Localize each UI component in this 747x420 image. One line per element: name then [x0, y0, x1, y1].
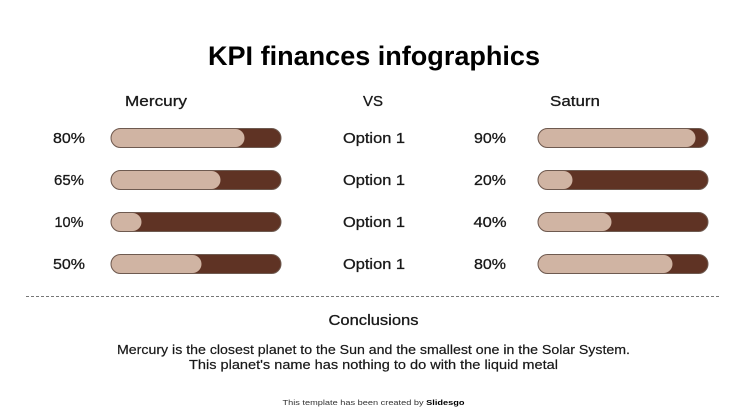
Mercury value 65%: 65% — [54, 172, 84, 189]
credit: This template has been created by Slidesgo — [282, 398, 465, 407]
Saturn bar 80% — [538, 254, 708, 274]
Saturn bar 40% — [538, 212, 708, 232]
Mercury value 10%: 10% — [54, 214, 84, 231]
conclusions heading: Conclusions — [328, 312, 418, 329]
Saturn bar 20% — [538, 170, 708, 190]
Saturn value 20%: 20% — [474, 172, 506, 189]
option label: Option 1 — [343, 130, 405, 147]
option label: Option 1 — [343, 172, 405, 189]
Mercury bar 80% — [111, 128, 281, 148]
title: KPI finances infographics — [208, 41, 540, 71]
conclusions body — [117, 342, 630, 372]
row 3 — [54, 212, 708, 232]
Saturn value 80%: 80% — [474, 256, 506, 273]
heading: Saturn: Saturn — [550, 93, 600, 110]
Mercury bar 65% — [111, 170, 281, 190]
Saturn value 90%: 90% — [474, 130, 506, 147]
conclusions body: This planet's name has nothing to do with the liquid metal — [189, 357, 558, 372]
option label: Option 1 — [343, 256, 405, 273]
Mercury value 80%: 80% — [53, 130, 85, 147]
Saturn bar 90% — [538, 128, 708, 148]
row 4 — [53, 254, 708, 274]
option label: Option 1 — [343, 214, 405, 231]
heading: VS: VS — [363, 93, 383, 110]
Saturn value 40%: 40% — [474, 214, 506, 231]
Mercury bar 50% — [111, 254, 281, 274]
row 1 — [53, 128, 708, 148]
Mercury value 50%: 50% — [53, 256, 85, 273]
conclusions body: Mercury is the closest planet to the Sun and the smallest one in the Solar System. — [117, 342, 630, 357]
row 2 — [54, 170, 708, 190]
Mercury bar 10% — [111, 212, 281, 232]
heading: Mercury: Mercury — [125, 93, 188, 110]
